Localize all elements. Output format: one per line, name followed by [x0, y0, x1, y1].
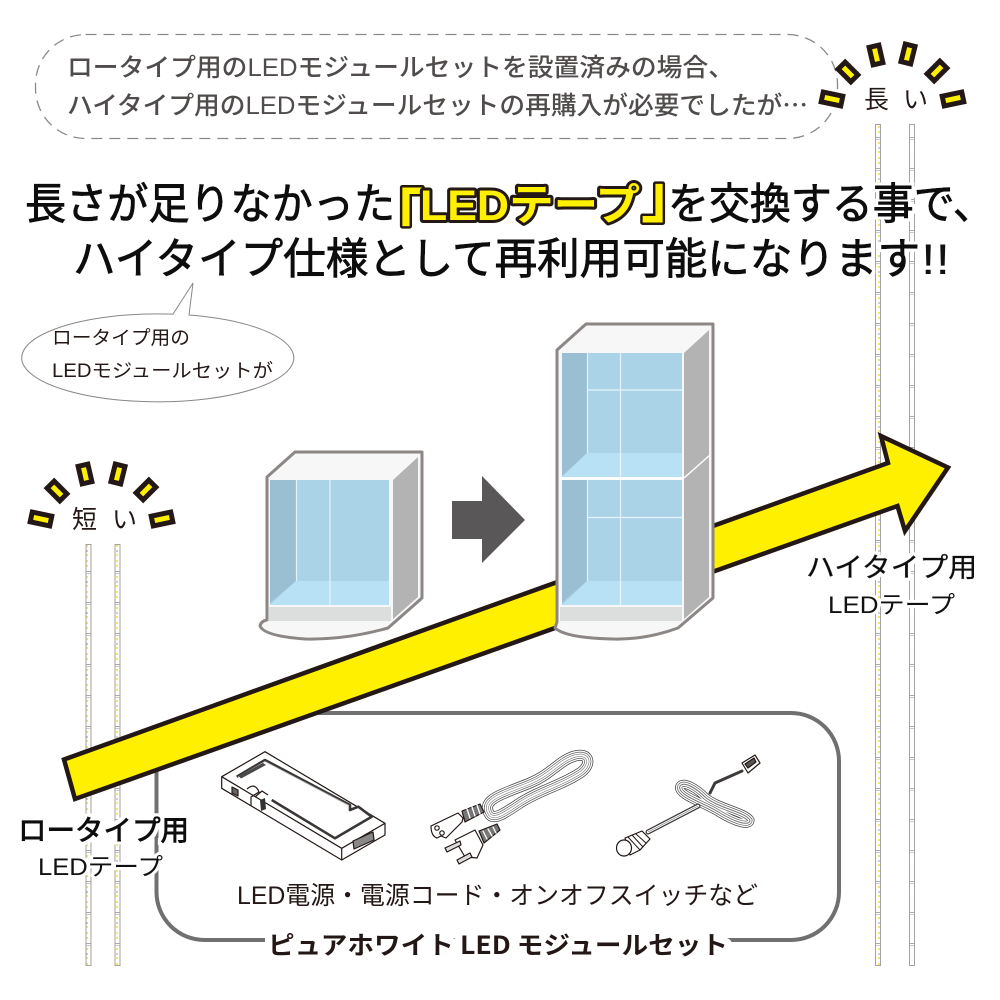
cable to connector	[710, 771, 742, 793]
unit body	[222, 752, 385, 860]
note text: ロータイプ用のLEDモジュールセットを設置済みの場合、	[67, 54, 734, 82]
note text	[67, 54, 808, 122]
cord coil	[487, 755, 588, 817]
label: low type tape	[18, 815, 189, 881]
connector	[742, 755, 760, 773]
bubble text	[52, 327, 273, 382]
highlighted LED tape	[364, 163, 701, 252]
highlighted LED tape: 「	[364, 185, 424, 252]
module set frame	[156, 713, 839, 962]
badge: short	[30, 464, 173, 536]
LED strips: long pair	[876, 124, 914, 966]
highlighted LED tape: 」	[641, 163, 701, 230]
label: long: 長 い	[864, 80, 928, 116]
maker mark	[238, 763, 266, 778]
base plate	[269, 607, 391, 621]
icon: LED power unit	[222, 752, 385, 860]
cabinet body	[260, 452, 422, 639]
label: low type tape line 2: LEDテープ	[38, 854, 163, 881]
exclamation marks: !!	[921, 236, 950, 284]
clip notch	[247, 786, 268, 806]
side panel	[393, 457, 418, 619]
rays: short	[30, 464, 173, 526]
upper glass left	[562, 353, 587, 476]
push button	[616, 831, 650, 856]
rays: long	[821, 44, 964, 106]
glass floor	[270, 581, 389, 605]
upper glass back	[562, 353, 682, 477]
label: low type tape: ロータイプ用	[18, 815, 189, 846]
tall cabinet	[555, 324, 713, 639]
badge: long	[821, 44, 964, 116]
headline line 1 start: 長さが足りなかった	[25, 181, 395, 229]
dividers	[560, 353, 710, 605]
lower glass back	[562, 480, 682, 605]
base plate	[560, 607, 682, 621]
cabinet body	[555, 324, 713, 639]
side panels	[684, 330, 709, 619]
note text: ハイタイプ用のLEDモジュールセットの再購入が必要でしたが …	[67, 86, 808, 122]
recessed panel	[237, 760, 372, 838]
LED strips: short pair	[86, 544, 120, 966]
glass back	[270, 480, 389, 605]
right socket	[353, 832, 374, 849]
bubble text: LEDモジュールセットが	[52, 360, 273, 382]
small cabinet	[260, 452, 422, 639]
label: high type tape	[806, 553, 977, 619]
upper glass floor	[562, 453, 682, 477]
label: high type tape line 2: LEDテープ	[828, 592, 955, 619]
dark switch	[260, 798, 266, 811]
bubble text: ロータイプ用の	[52, 327, 190, 349]
connector plug	[431, 804, 484, 838]
headline	[25, 163, 994, 284]
dashed note box	[36, 34, 838, 138]
arrow between cabinets	[452, 476, 525, 563]
contents caption: LED電源・電源コード・オンオフスイッチなど	[237, 882, 758, 910]
cable to switch	[648, 806, 698, 832]
lower glass left	[562, 480, 587, 603]
headline line 2: ハイタイプ仕様として再利用可能になります	[73, 236, 920, 284]
switch cable coil	[680, 784, 750, 823]
module set title: ピュアホワイト LED モジュールセット	[268, 926, 728, 962]
icon: on/off switch cable	[616, 755, 760, 856]
left jack	[232, 787, 238, 796]
highlighted LED tape: LEDテープ	[420, 182, 640, 230]
icon: power cord	[431, 755, 588, 864]
glass left	[270, 480, 296, 603]
glass dividers	[296, 480, 330, 605]
speech bubble	[22, 283, 294, 402]
lower glass floor	[562, 581, 682, 605]
wall plug	[445, 824, 500, 864]
label: high type tape: ハイタイプ用	[806, 553, 977, 583]
label: short: 短 い	[72, 500, 137, 536]
yellow growth arrow	[64, 436, 948, 799]
